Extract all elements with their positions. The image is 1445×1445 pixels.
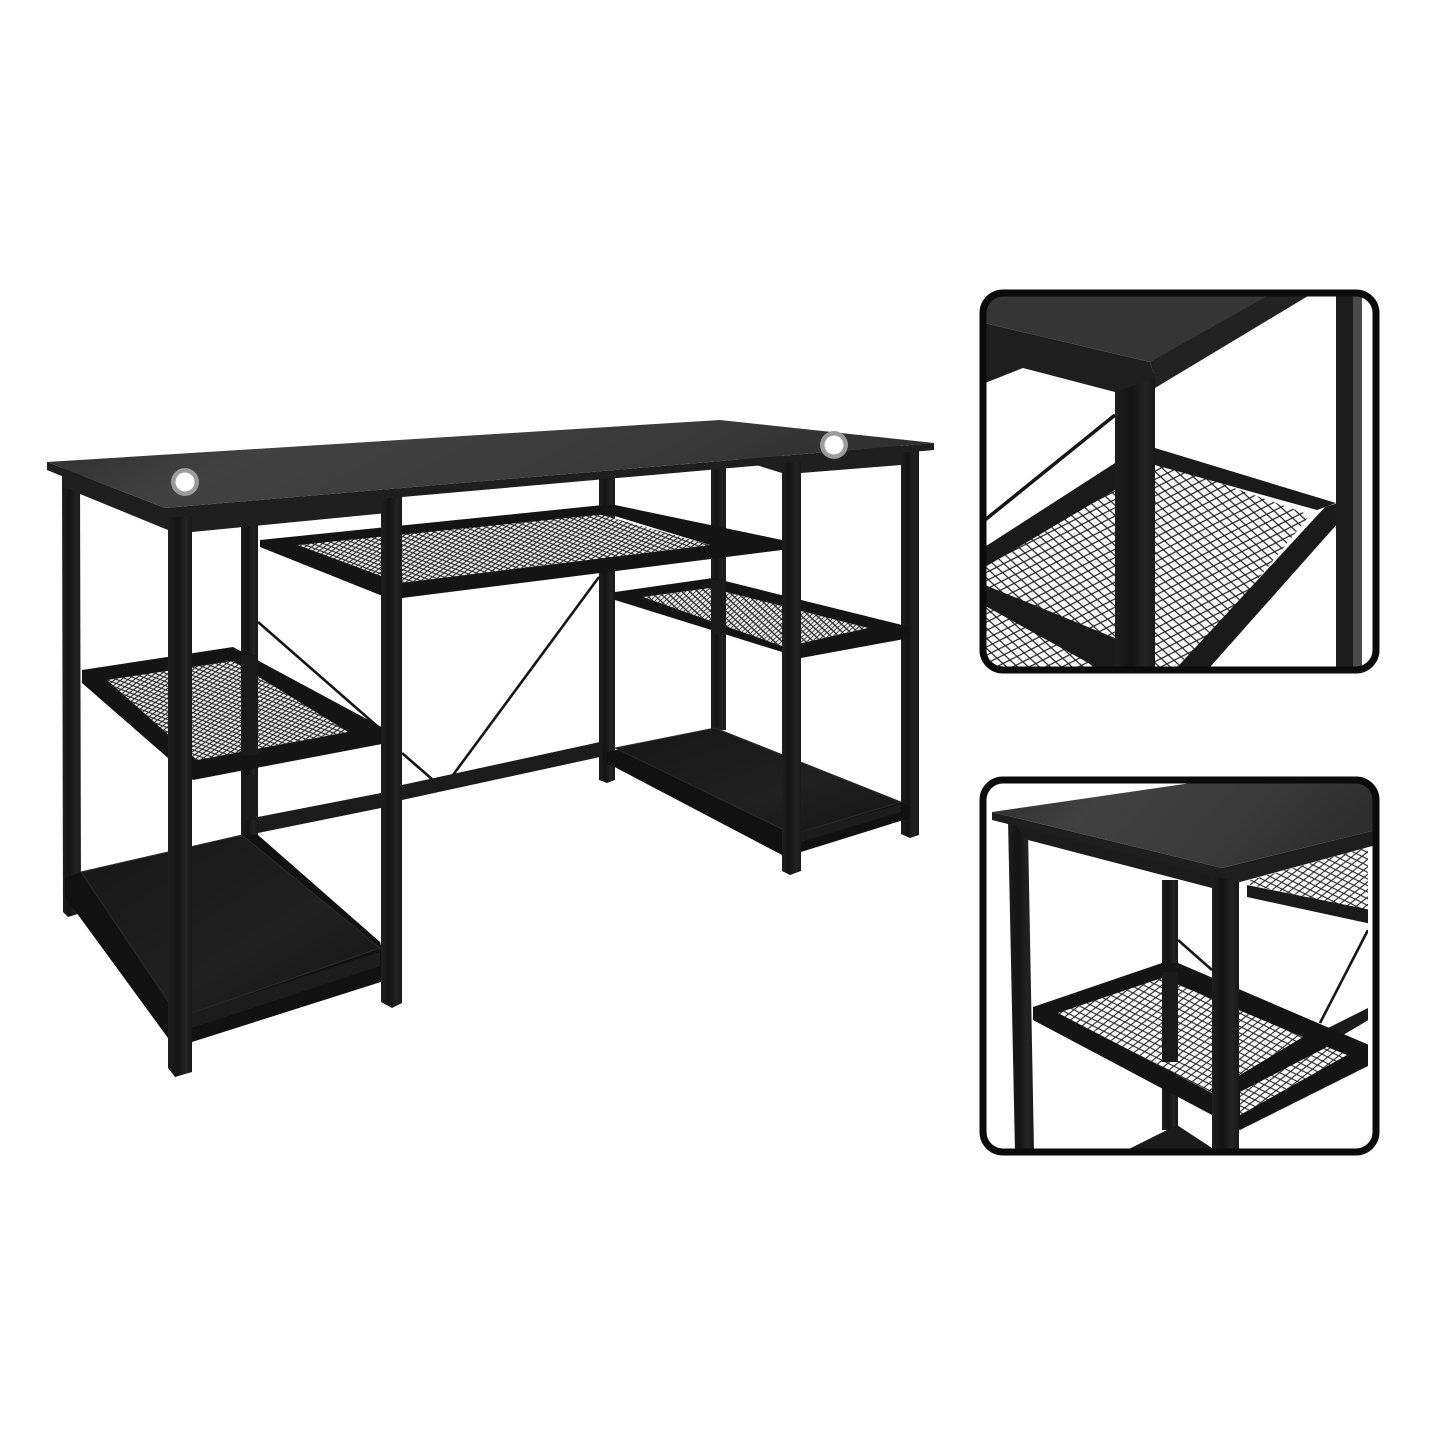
diagonal braces [258, 577, 599, 780]
brace rods [1178, 930, 1368, 1023]
rear inner leg [1162, 880, 1178, 1130]
close-up leg [1115, 373, 1155, 673]
shelf rails [980, 448, 1338, 675]
rear legs [62, 448, 919, 917]
left mesh shelf [82, 647, 387, 820]
close-up rear post [1336, 290, 1362, 675]
center mesh shelf [260, 505, 782, 598]
lower board [1130, 1126, 1212, 1148]
mesh panels [1058, 978, 1303, 1093]
shelf frame [1033, 963, 1376, 1130]
close-up tabletop [986, 296, 1266, 362]
right bottom shelf [607, 728, 910, 855]
front legs [168, 458, 801, 1077]
lower stretchers [258, 742, 600, 833]
left bottom shelf [65, 835, 387, 1042]
under-top skirts [63, 445, 901, 532]
product illustration [47, 290, 1380, 1156]
right mesh shelf [615, 578, 910, 658]
tabletop edge and skirt [992, 812, 1376, 882]
mesh close-up [980, 460, 1310, 675]
brace rod [980, 415, 1115, 524]
panel border [983, 780, 1376, 1152]
cable grommet right [820, 431, 848, 459]
side skirt [1018, 827, 1212, 888]
tabletop [47, 420, 934, 518]
front corner leg [1212, 872, 1239, 1155]
close-up underside of top [1150, 296, 1308, 388]
detail panel: top corner and mesh shelf [980, 290, 1376, 675]
stretcher [1328, 1008, 1368, 1034]
right white margin [1368, 846, 1372, 1066]
cable grommet left [171, 468, 199, 496]
far mesh [1250, 848, 1368, 908]
panel border [983, 293, 1376, 670]
main desk [47, 420, 934, 1077]
detail panel: side view and mesh shelf [983, 780, 1376, 1155]
side leg [1008, 820, 1034, 1152]
far shelf rail [1247, 885, 1376, 925]
close-up skirt [980, 322, 1155, 392]
tabletop [992, 781, 1376, 868]
